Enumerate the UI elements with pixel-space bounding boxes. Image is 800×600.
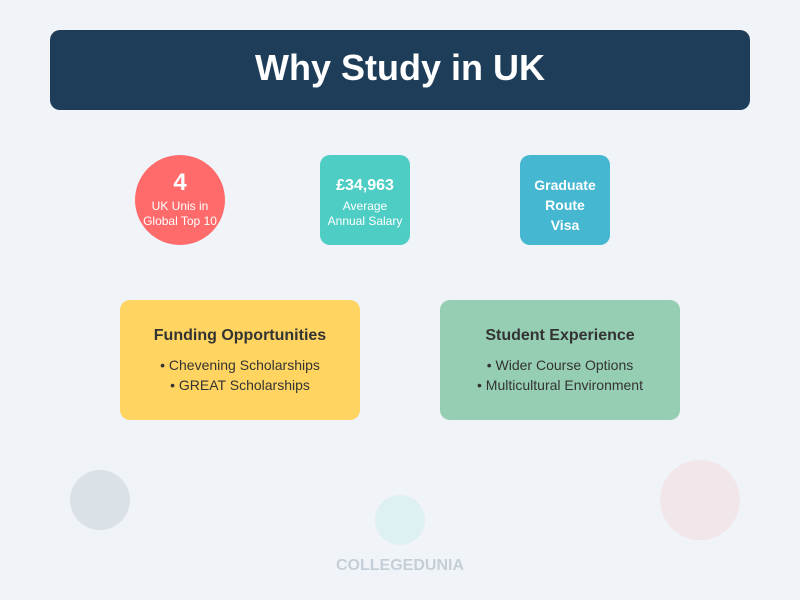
experience list: • Wider Course Options [487, 357, 633, 373]
panel: funding opportunities [120, 300, 360, 420]
panel heading: experience: Student Experience [485, 327, 635, 344]
panel: student experience [440, 300, 680, 420]
stat: graduate route visa: Graduate [534, 177, 596, 193]
watermark: COLLEGEDUNIA [336, 557, 464, 574]
funding list [160, 357, 320, 393]
stat: UK universities in top 10: UK Unis in [152, 199, 208, 213]
decorative circle: navy [70, 470, 130, 530]
stat: UK universities in top 10: 4 [173, 169, 187, 196]
decorative circle: red [660, 460, 740, 540]
stat: UK universities in top 10 [135, 155, 225, 245]
stat: average annual salary: Average [343, 199, 387, 213]
funding list: • Chevening Scholarships [160, 357, 320, 373]
title banner [50, 30, 750, 110]
experience list [477, 357, 643, 393]
title: Why Study in UK [255, 47, 545, 88]
stat: average annual salary [320, 155, 410, 245]
experience list: • Multicultural Environment [477, 377, 643, 393]
funding list: • GREAT Scholarships [170, 377, 310, 393]
stat: graduate route visa: Route [545, 197, 585, 213]
decorative circle: teal [375, 495, 425, 545]
stat: average annual salary: Annual Salary [328, 214, 402, 228]
stat: UK universities in top 10: Global Top 10 [143, 214, 217, 228]
stat: average annual salary: £34,963 [336, 177, 394, 194]
panel heading: funding: Funding Opportunities [154, 327, 326, 344]
stat: graduate route visa [520, 155, 610, 245]
stat: graduate route visa: Visa [551, 217, 579, 233]
